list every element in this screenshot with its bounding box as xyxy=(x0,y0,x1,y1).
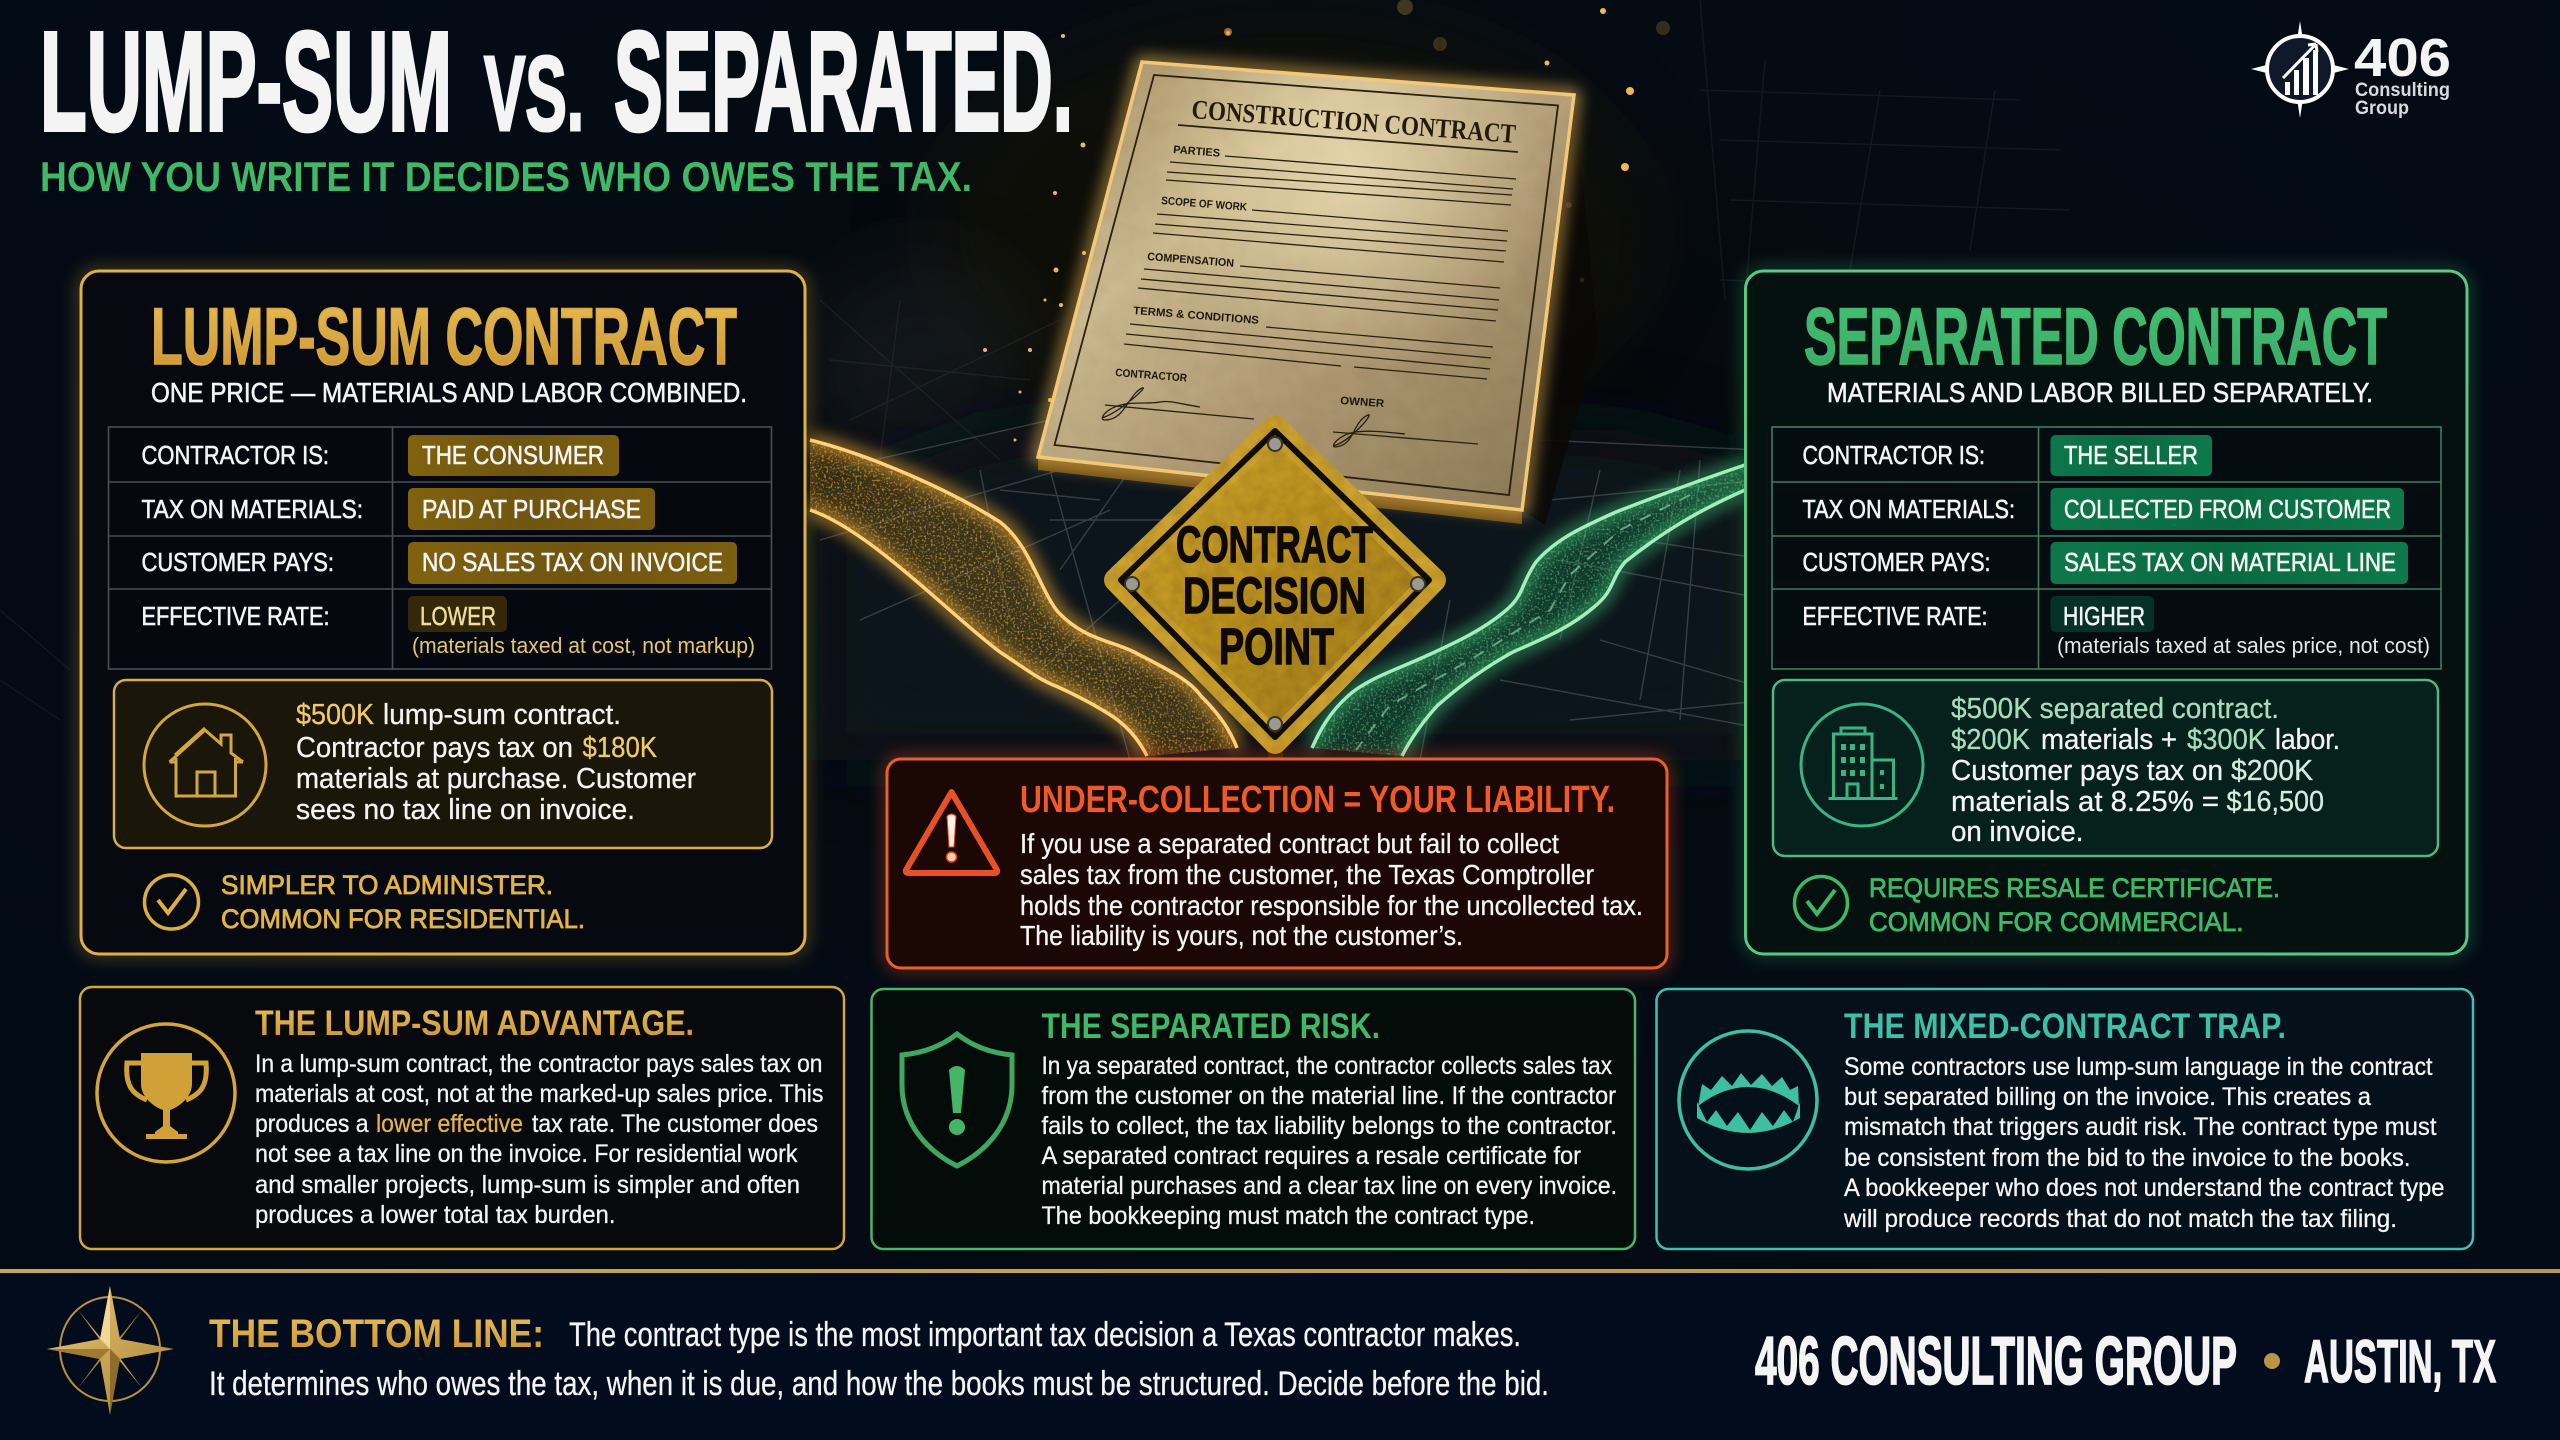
takeaway: REQUIRES RESALE CERTIFICATE. xyxy=(1869,873,2280,903)
title: SEPARATED. xyxy=(614,2,1073,160)
body text: from the customer on the material line. If the contractor xyxy=(1042,1082,1616,1110)
decision sign xyxy=(1116,427,1434,760)
warning heading: UNDER-COLLECTION = YOUR LIABILITY. xyxy=(1020,779,1615,821)
body text: fails to collect, the tax liability belongs to the contractor. xyxy=(1042,1112,1617,1140)
body text: In ya separated contract, the contractor collects sales tax xyxy=(1042,1052,1612,1080)
title: VS. xyxy=(484,35,584,153)
icon: shield xyxy=(902,1034,1012,1166)
example box: sees no tax line on invoice. xyxy=(296,794,635,826)
body text xyxy=(1042,1052,1617,1230)
icon: check xyxy=(1794,876,1848,930)
comparison table: COLLECTED FROM CUSTOMER xyxy=(2064,494,2391,524)
subheading: ONE PRICE — MATERIALS AND LABOR COMBINED. xyxy=(151,377,747,408)
bottom line text xyxy=(209,1312,1549,1403)
example box: $500K xyxy=(296,699,375,731)
comparison table: TAX ON MATERIALS: xyxy=(142,494,363,524)
bottom line text: It determines who owes the tax, when it is due, and how the books must be structured. Decide before the bid. xyxy=(209,1365,1549,1403)
logo: Group xyxy=(2355,98,2409,119)
subheading: MATERIALS AND LABOR BILLED SEPARATELY. xyxy=(1827,377,2373,408)
contract document: CONSTRUCTION CONTRACT xyxy=(1191,94,1517,149)
example box: labor. xyxy=(2275,724,2340,756)
body text: A separated contract requires a resale certificate for xyxy=(1042,1142,1581,1170)
example box: $300K xyxy=(2187,724,2267,756)
example box: materials + xyxy=(2041,724,2177,756)
example box: on invoice. xyxy=(1951,816,2084,848)
comparison table: HIGHER xyxy=(2063,601,2145,631)
icon: house xyxy=(144,704,266,826)
comparison table: CUSTOMER PAYS: xyxy=(1802,547,1990,577)
icon: trophy xyxy=(97,1024,235,1162)
body text: lower effective xyxy=(376,1110,523,1138)
warning body: If you use a separated contract but fail to collect xyxy=(1020,828,1559,859)
contract document: PARTIES xyxy=(1173,144,1221,160)
icon: compass star xyxy=(47,1286,174,1415)
heading: LUMP-SUM CONTRACT xyxy=(151,292,737,382)
decision sign: CONTRACT xyxy=(1176,516,1373,573)
contract document xyxy=(1038,62,1598,525)
example box: lump-sum contract. xyxy=(383,699,621,731)
example box: $16,500 xyxy=(2226,786,2324,818)
comparison table: SALES TAX ON MATERIAL LINE xyxy=(2064,547,2396,577)
example box: $200K xyxy=(1951,724,2031,756)
warning body: sales tax from the customer, the Texas Comptroller xyxy=(1020,859,1594,890)
comparison table: (materials taxed at cost, not markup) xyxy=(412,633,755,658)
comparison table xyxy=(108,427,772,669)
icon: compass logo xyxy=(2251,21,2349,118)
body text: tax rate. The customer does xyxy=(532,1110,818,1138)
contract document: COMPENSATION xyxy=(1147,251,1234,270)
body text: material purchases and a clear tax line on every invoice. xyxy=(1042,1172,1617,1200)
example box: Contractor pays tax on xyxy=(296,732,573,764)
comparison table: CUSTOMER PAYS: xyxy=(142,547,334,577)
logo: Consulting xyxy=(2355,80,2450,101)
body text: materials at cost, not at the marked-up sales price. This xyxy=(255,1080,824,1108)
body text xyxy=(255,1050,824,1229)
comparison table: PAID AT PURCHASE xyxy=(422,494,641,524)
warning body: The liability is yours, not the customer’s. xyxy=(1020,920,1463,951)
body text: but separated billing on the invoice. This creates a xyxy=(1844,1083,2371,1111)
icon: bear trap xyxy=(1679,1031,1817,1169)
panel: the mixed-contract trap xyxy=(1656,989,2473,1249)
body text: be consistent from the bid to the invoice to the books. xyxy=(1844,1144,2410,1172)
example box: materials at 8.25% = xyxy=(1951,786,2219,818)
logo: 406 xyxy=(2354,28,2451,88)
comparison table: (materials taxed at sales price, not cost) xyxy=(2057,633,2430,658)
warning body: holds the contractor responsible for the uncollected tax. xyxy=(1020,890,1643,921)
comparison table: THE CONSUMER xyxy=(422,440,604,470)
heading: THE SEPARATED RISK. xyxy=(1042,1007,1380,1046)
example box: Customer pays tax on xyxy=(1951,755,2223,787)
subtitle: HOW YOU WRITE IT DECIDES WHO OWES THE TAX. xyxy=(40,153,972,200)
comparison table: EFFECTIVE RATE: xyxy=(1802,601,1988,631)
example box: $180K xyxy=(582,732,658,764)
body text: not see a tax line on the invoice. For residential work xyxy=(255,1140,798,1168)
body text: and smaller projects, lump-sum is simpler and often xyxy=(255,1171,800,1199)
body text: The bookkeeping must match the contract type. xyxy=(1042,1202,1535,1230)
icon: check xyxy=(144,875,198,929)
sign rivets xyxy=(1125,437,1425,731)
comparison table: THE SELLER xyxy=(2064,440,2198,470)
body text xyxy=(1843,1053,2444,1233)
comparison table: CONTRACTOR IS: xyxy=(1802,440,1985,470)
title: LUMP-SUM xyxy=(40,2,452,160)
comparison table: TAX ON MATERIALS: xyxy=(1802,494,2015,524)
heading: THE LUMP-SUM ADVANTAGE. xyxy=(255,1004,694,1043)
bottom line text: The contract type is the most important tax decision a Texas contractor makes. xyxy=(569,1316,1521,1354)
body text: produces a lower total tax burden. xyxy=(255,1201,616,1229)
comparison table: LOWER xyxy=(420,601,496,631)
takeaway: COMMON FOR COMMERCIAL. xyxy=(1869,907,2244,937)
contract document: SCOPE OF WORK xyxy=(1161,195,1247,214)
comparison table: CONTRACTOR IS: xyxy=(142,440,329,470)
comparison table xyxy=(1772,427,2441,669)
example box: materials at purchase. Customer xyxy=(296,763,696,795)
sparkles xyxy=(983,0,1670,442)
comparison table: EFFECTIVE RATE: xyxy=(142,601,330,631)
contract document: TERMS & CONDITIONS xyxy=(1133,305,1259,327)
contract document: CONTRACTOR xyxy=(1115,367,1188,385)
body text: produces a xyxy=(255,1110,369,1138)
heading: THE MIXED-CONTRACT TRAP. xyxy=(1844,1007,2286,1046)
panel: the lump-sum advantage xyxy=(80,987,844,1249)
panel: separated contract xyxy=(1746,271,2467,954)
body text: mismatch that triggers audit risk. The contract type must xyxy=(1844,1113,2437,1141)
roads: gold and green paths xyxy=(810,440,1745,756)
takeaway xyxy=(221,870,585,934)
contract document: OWNER xyxy=(1340,395,1385,410)
callout: under-collection warning xyxy=(887,759,1667,968)
decision sign: DECISION xyxy=(1183,567,1366,624)
icon: warning triangle xyxy=(906,792,997,873)
bottom line text: THE BOTTOM LINE: xyxy=(209,1312,544,1356)
takeaway: COMMON FOR RESIDENTIAL. xyxy=(221,904,585,934)
body text: In a lump-sum contract, the contractor pays sales tax on xyxy=(255,1050,822,1078)
body text: Some contractors use lump-sum language in the contract xyxy=(1844,1053,2433,1081)
body text: A bookkeeper who does not understand the contract type xyxy=(1844,1174,2444,1202)
icon: buildings xyxy=(1801,704,1923,826)
warning body xyxy=(1020,828,1643,951)
example box: $500K separated contract. xyxy=(1951,693,2279,725)
footer band xyxy=(0,1269,2560,1440)
comparison table: NO SALES TAX ON INVOICE xyxy=(422,547,723,577)
panel: lump-sum contract xyxy=(81,271,805,954)
example box xyxy=(1773,680,2438,856)
takeaway: SIMPLER TO ADMINISTER. xyxy=(221,870,553,900)
panel: the separated risk xyxy=(872,989,1635,1249)
logo xyxy=(2251,21,2451,119)
takeaway xyxy=(1869,873,2280,937)
example box: $200K xyxy=(2231,755,2314,787)
decision sign: POINT xyxy=(1219,618,1334,675)
example box xyxy=(114,680,772,848)
body text: will produce records that do not match the tax filing. xyxy=(1843,1205,2397,1233)
